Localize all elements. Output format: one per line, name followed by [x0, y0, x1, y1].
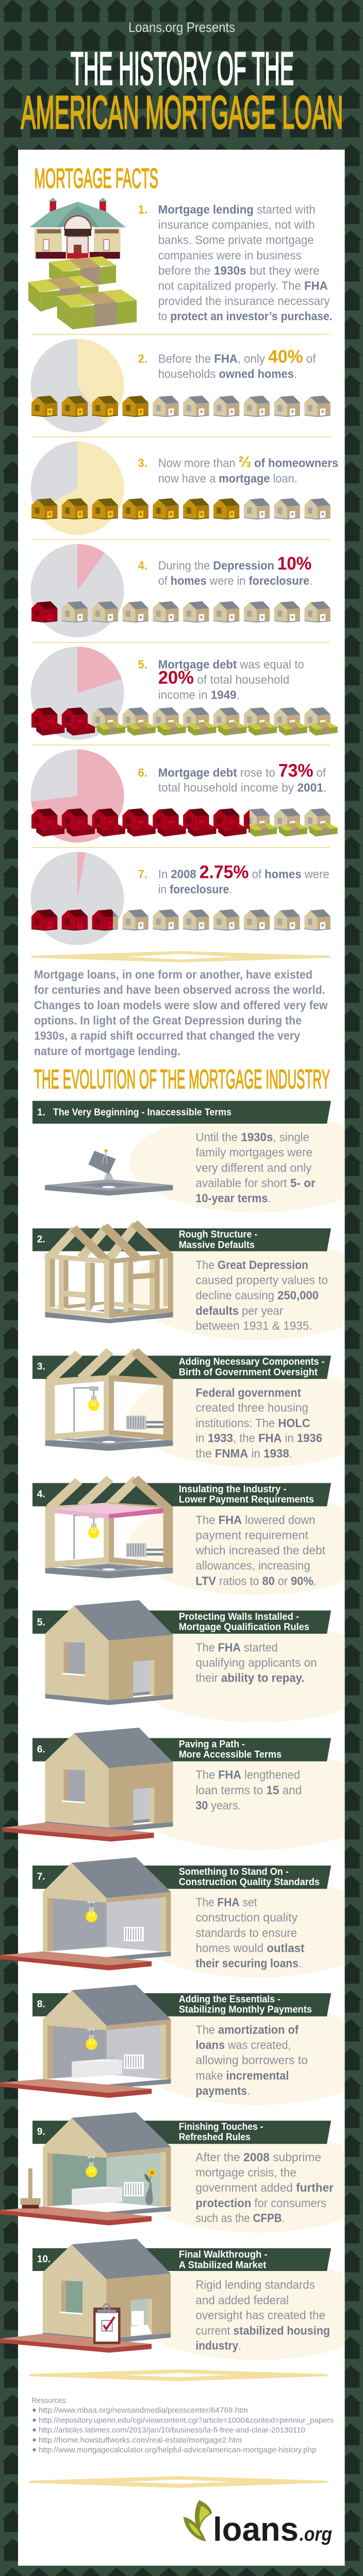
step 2 text: decline causing 250,000 [195, 1289, 319, 1302]
step 4 text: The FHA lowered down [195, 1513, 316, 1527]
step 4 text: which increased the debt [195, 1544, 326, 1557]
fact 1: companies were in business [158, 248, 302, 262]
step 10 text: oversight has created the [195, 2309, 325, 2322]
fact 2: 40 percent: households owned homes. [158, 367, 297, 380]
icon: frame with wiring and radiator [45, 1351, 173, 1451]
step 7 text: homes would outlast [195, 1941, 305, 1955]
resources list: Resources: [32, 2397, 68, 2405]
fact 2: 40 percent [31, 339, 331, 432]
step 9 text: mortgage crisis, the [195, 2166, 296, 2179]
step 4 banner: Lower Payment Requirements [179, 1495, 314, 1505]
step 6 [2, 1727, 331, 1841]
intro paragraph: Changes to loan models were slow and offered very few [34, 998, 327, 1012]
step 10 banner: A Stabilized Market [179, 2260, 267, 2271]
step 2 text: caused property values to [195, 1274, 328, 1287]
fact 6: 73 percent: total household income by 2001. [158, 781, 326, 794]
step 6 banner: More Accessible Terms [179, 1750, 282, 1760]
resources list: http://home.howstuffworks.com/real-estate/mortgage2.htm [39, 2436, 242, 2445]
fact 4: 10 percent [31, 544, 331, 637]
step 3 text: Federal government [195, 1386, 301, 1399]
step 1 text: 10-year terms. [195, 1192, 271, 1205]
step 3 text: institutions: The HOLC [195, 1416, 310, 1430]
step 3 banner [32, 1355, 331, 1379]
step 3 banner: 3. [37, 1362, 45, 1372]
step 7 text: their securing loans. [195, 1957, 302, 1970]
fact 6: 73 percent: Mortgage debt rose to 73% of [158, 760, 326, 781]
step 5 banner: 5. [37, 1617, 45, 1628]
step 8 text: allowing borrowers to [195, 2054, 308, 2067]
step 1 banner: 1. [37, 1107, 45, 1118]
fact 5: 20 percent: 5. [138, 657, 147, 671]
step 1 text: very different and only [195, 1161, 312, 1174]
icon: broom [21, 2168, 41, 2209]
step 5 text: The FHA started [195, 1641, 278, 1654]
step 5 [32, 1600, 331, 1705]
intro paragraph: Mortgage loans, in one form or another, have existed [34, 968, 312, 981]
step 3 text: in 1933, the FHA in 1936 [195, 1431, 322, 1445]
icon: frame with pink insulation [45, 1479, 173, 1579]
step 5 text: qualifying applicants on [195, 1656, 317, 1669]
icon: flower vase [144, 2169, 156, 2205]
fact 2: 40 percent: Before the FHA, only 40% of [158, 347, 316, 367]
fact 6: 73 percent: 6. [138, 766, 147, 779]
fact 7: 2.75 percent [31, 852, 331, 945]
step 4 text: LTV ratios to 80 or 90%. [195, 1574, 317, 1587]
fact 7: 2.75 percent: In 2008 2.75% of homes were [158, 862, 329, 883]
header [21, 20, 343, 139]
step 7 banner: 7. [37, 1871, 45, 1883]
step 6 banner [32, 1738, 331, 1761]
panel: mortgage facts: MORTGAGE FACTS [34, 163, 158, 194]
fact 1: before the 1930s but they were [158, 264, 320, 277]
intro paragraph: options. In light of the Great Depression during the [34, 1014, 302, 1027]
resources list: http://articles.latimes.com/2013/jan/10/business/la-fi-free-and-clear-20130110 [39, 2427, 305, 2435]
step 2 banner: 2. [37, 1234, 45, 1245]
cream backdrops [129, 1112, 363, 2360]
icon: concrete bucket pouring a foundation [45, 1149, 173, 1196]
icon: logo leaves [184, 2500, 212, 2541]
step 4 [32, 1479, 331, 1587]
step 8 banner [32, 1993, 331, 2016]
intro paragraph [34, 968, 327, 1058]
fact 1: not capitalized properly. The FHA [158, 279, 328, 293]
presenter line: Loans.org Presents [128, 20, 235, 35]
step 8 banner: 8. [37, 1999, 45, 2010]
step 7 banner [32, 1866, 331, 1889]
step 4 text [195, 1513, 326, 1587]
step 10 text: Rigid lending standards [195, 2278, 315, 2292]
step 9 text: After the 2008 subprime [195, 2150, 321, 2164]
icon: cut-away house with tub [0, 1985, 171, 2098]
house row: 7 of 10 [31, 498, 331, 519]
step 8 text: The amortization of [195, 2023, 299, 2036]
panel: mortgage facts [28, 163, 338, 945]
step 3 text: the FNMA in 1938. [195, 1447, 292, 1460]
step 5 text [195, 1641, 317, 1685]
step 1 [32, 1101, 331, 1205]
fact 3: two thirds: Now more than ⅔ of homeowners [158, 453, 338, 470]
fact 2: 40 percent: 2. [138, 352, 147, 365]
step 7 text [195, 1895, 305, 1970]
step 4 text: payment requirement [195, 1528, 309, 1541]
icon: house with path [2, 1727, 173, 1841]
step 4 banner: Insulating the Industry - [179, 1484, 287, 1495]
step 10 [0, 2239, 331, 2352]
step 10 text [195, 2278, 330, 2352]
step 4 banner: 4. [37, 1489, 45, 1500]
resources list [32, 2397, 334, 2454]
intro paragraph: 1930s, a rapid shift occurred that changed the very [34, 1029, 300, 1042]
step 2 text [195, 1258, 328, 1332]
icon: finished house on path [0, 2239, 171, 2352]
step 1 text: available for short 5- or [195, 1176, 316, 1190]
fact 4: 10 percent: 4. [138, 559, 147, 572]
fact 5: 20 percent [31, 647, 338, 740]
step 8 text: make incremental [195, 2069, 289, 2082]
step 7 text: construction quality [195, 1911, 298, 1924]
resources list: http://www.mbaa.org/newsandmedia/presscenter/64769.htm [39, 2406, 248, 2415]
step 5 banner: Mortgage Qualification Rules [179, 1622, 309, 1633]
pie chart: 40% [31, 339, 124, 432]
step 7 text: The FHA set [195, 1895, 257, 1909]
step 6 text [195, 1768, 302, 1812]
fact 1: banks. Some private mortgage [158, 233, 314, 247]
house row: 4 of 10 [31, 396, 331, 417]
step 3 banner: Adding Necessary Components - [179, 1357, 325, 1367]
step 3 [32, 1351, 331, 1460]
icon: closed house [45, 1600, 173, 1705]
fact 3: two thirds [31, 442, 338, 535]
icon: painted cut-away house with vase and broom [0, 2112, 171, 2225]
icon: mansion [30, 198, 126, 259]
step 10 banner [32, 2248, 331, 2271]
step 8 banner: Stabilizing Monthly Payments [179, 2005, 312, 2015]
step 8 text [195, 2023, 308, 2097]
fact 4: 10 percent: of homes were in foreclosure. [158, 574, 312, 587]
step 9 text [195, 2150, 334, 2225]
step 2 text: defaults per year [195, 1304, 283, 1317]
house row with money: 7.3 of 10 [31, 808, 338, 837]
step 10 text: current stabilized housing [195, 2324, 330, 2337]
step 1 banner: The Very Beginning - Inaccessible Terms [53, 1107, 232, 1118]
step 7 banner: Construction Quality Standards [179, 1877, 320, 1888]
fact 4: 10 percent: During the Depression 10% [158, 554, 311, 574]
step 2 banner [32, 1228, 331, 1251]
step 9 text: protection for consumers [195, 2196, 326, 2210]
step 10 banner: 10. [37, 2254, 51, 2265]
step 8 [0, 1985, 331, 2098]
step 2 banner: Rough Structure - [179, 1229, 257, 1240]
pie chart: two thirds [31, 442, 124, 535]
step 2 banner: Massive Defaults [179, 1240, 255, 1250]
step 7 [0, 1857, 331, 1970]
step 10 banner: Final Walkthrough - [179, 2249, 268, 2260]
fact 1: provided the insurance necessary [158, 294, 330, 308]
fact 7: 2.75 percent: 7. [138, 868, 147, 881]
pie chart: 73% [31, 749, 124, 843]
step 10 text: industry. [195, 2339, 241, 2352]
step 2 [32, 1223, 331, 1332]
step 2 text: The Great Depression [195, 1258, 308, 1272]
step 10 text: and added federal [195, 2293, 289, 2307]
fact 1: insurance companies, not with [158, 218, 315, 231]
fact 5: 20 percent: Mortgage debt was equal to [158, 657, 304, 671]
pie chart: 10% [31, 544, 124, 637]
resources list: http://repository.upenn.edu/cgi/viewcontent.cgi?article=1000&context=penniur_papers [39, 2416, 334, 2425]
step 6 banner: 6. [37, 1744, 45, 1755]
step 9 [0, 2112, 334, 2225]
step 6 banner: Paving a Path - [179, 1739, 245, 1750]
step 1 text: Until the 1930s, single [195, 1130, 309, 1144]
step 9 banner: Refreshed Rules [179, 2132, 251, 2143]
step 3 text [195, 1386, 322, 1460]
fact 7: 2.75 percent: in foreclosure. [158, 883, 232, 896]
logo: loans.org: loans [213, 2510, 299, 2548]
icon: cut-away house with bulb and radiator [0, 1857, 171, 1970]
icon: clipboard with check mark [93, 2304, 121, 2344]
step 6 text: loan terms to 15 and [195, 1783, 302, 1797]
step 8 text: payments. [195, 2084, 250, 2097]
step 6 text: 30 years. [195, 1799, 241, 1812]
fact 1 [138, 203, 333, 323]
step 9 text: government added further [195, 2181, 334, 2194]
house row: 2.75 of 10 [31, 909, 331, 930]
logo: loans.org: .org [300, 2523, 332, 2545]
pie chart: 20% [31, 647, 124, 740]
step 3 banner: Birth of Government Oversight [179, 1367, 318, 1378]
step 5 banner [32, 1611, 331, 1634]
step 9 banner: 9. [37, 2127, 45, 2137]
pie chart: 2.75% [31, 852, 124, 945]
step 1 text [195, 1130, 316, 1205]
fact 6: 73 percent [31, 749, 338, 843]
step 8 text: loans was created, [195, 2038, 291, 2052]
fact 1: to protect an investor’s purchase. [158, 310, 333, 323]
step 2 text: between 1931 & 1935. [195, 1319, 312, 1332]
fact 5: 20 percent: 20% of total household [158, 668, 289, 688]
step 5 banner: Protecting Walls Installed - [179, 1612, 299, 1622]
step 4 banner [32, 1483, 331, 1506]
step 1 text: family mortgages were [195, 1146, 312, 1159]
step 4 text: allowances, increasing [195, 1559, 310, 1572]
house row: 1 of 10 [31, 601, 331, 622]
icon: rough house frame [45, 1223, 173, 1323]
step 9 banner: Finishing Touches - [179, 2122, 263, 2132]
step 9 text: such as the CFPB. [195, 2211, 285, 2225]
fact 3: two thirds: 3. [138, 456, 147, 469]
resources list: http://www.mortgagecalculator.org/helpful-advice/american-mortgage-history.php [39, 2446, 316, 2454]
intro paragraph: nature of mortgage lending. [34, 1044, 180, 1058]
intro paragraph: for centuries and have been observed across the world. [34, 983, 325, 996]
step 8 banner: Adding the Essentials - [179, 1994, 280, 2005]
logo: loans.org [184, 2500, 332, 2548]
step 7 text: standards to ensure [195, 1926, 297, 1939]
step 1 banner [32, 1101, 331, 1124]
step 3 text: created three housing [195, 1401, 308, 1414]
step 5 text: their ability to repay. [195, 1671, 304, 1685]
step 6 text: The FHA lengthened [195, 1768, 300, 1782]
house row with money: 2 of 10 [31, 707, 338, 736]
fact 5: 20 percent: income in 1949. [158, 688, 240, 701]
fact 1: Mortgage lending started with [158, 203, 316, 216]
icon: money stacks [28, 257, 137, 329]
fact 1: 1. [138, 203, 147, 216]
step 9 banner [32, 2121, 331, 2144]
step 7 banner: Something to Stand On - [179, 1867, 289, 1877]
fact 3: two thirds: now have a mortgage loan. [158, 471, 298, 485]
